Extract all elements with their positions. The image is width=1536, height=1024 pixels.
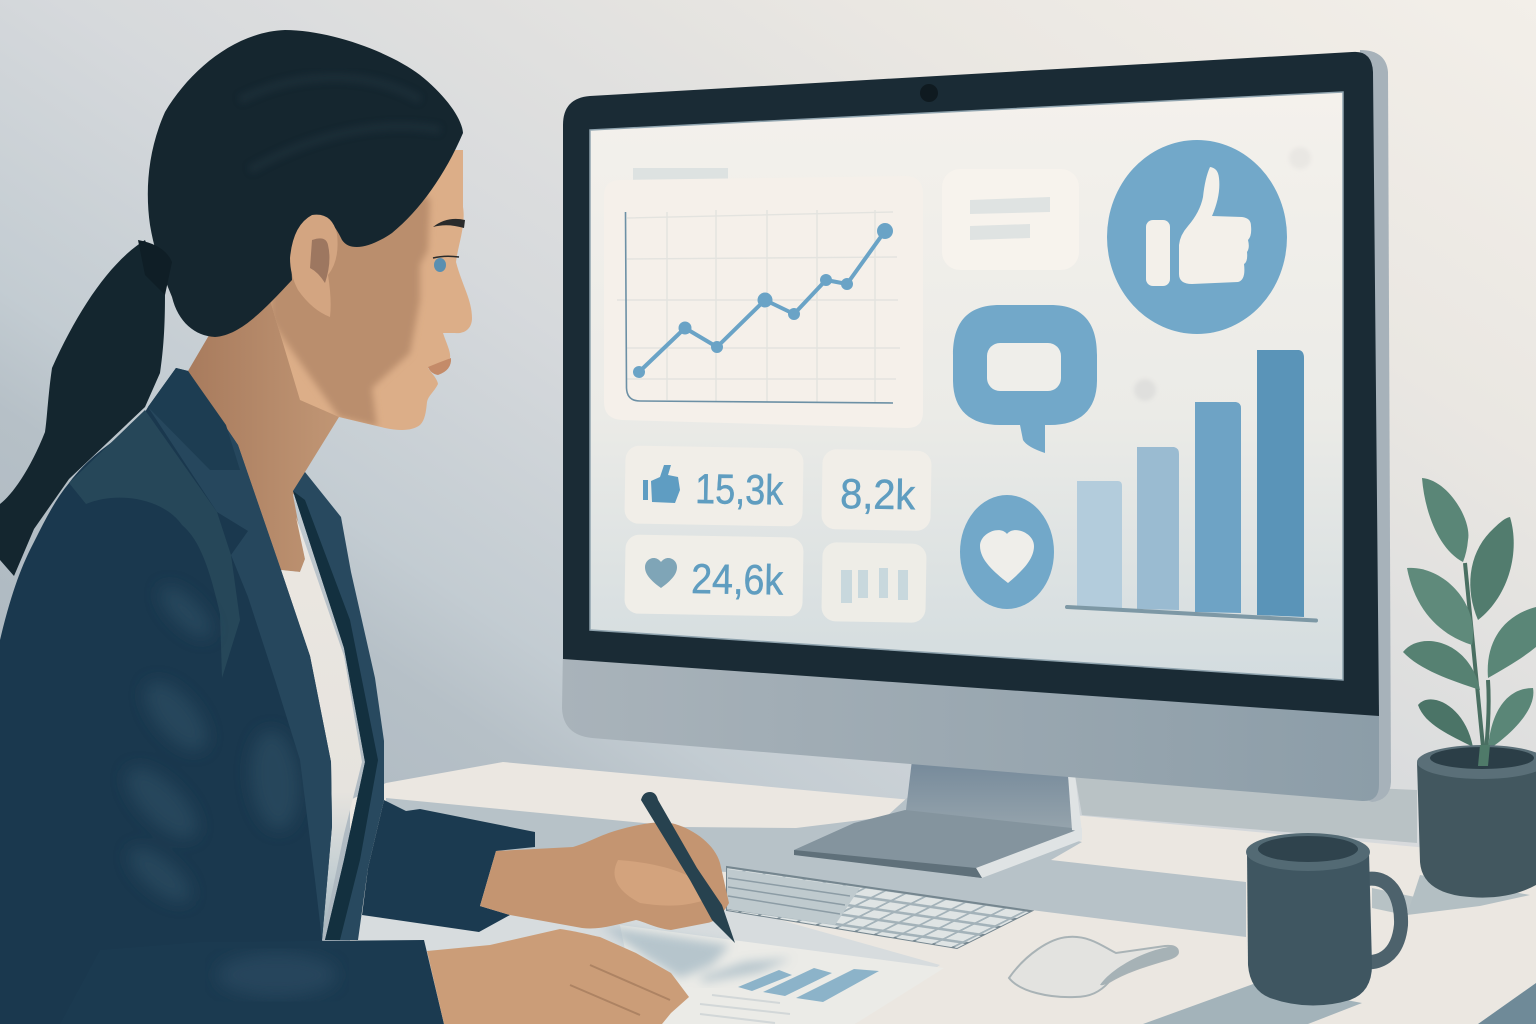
document text lines: [700, 995, 790, 1023]
title placeholder bar: [633, 168, 728, 183]
leaves: [1403, 478, 1536, 767]
mug shadow: [1143, 983, 1362, 1024]
desk lower area shade: [350, 905, 940, 1024]
ear: [290, 215, 338, 317]
text card: [942, 169, 1079, 270]
bar chart: [1067, 350, 1316, 620]
value 15,3k: 15,3k: [695, 465, 785, 514]
eyebrow: [433, 219, 465, 228]
chart axes: [626, 212, 893, 403]
blazer sleeve folds: [115, 578, 304, 912]
lower sleeve: [60, 940, 444, 1024]
desk corner shade: [1478, 983, 1536, 1024]
stat card: comments: [821, 449, 932, 531]
hair tie: [138, 240, 172, 295]
face: [270, 150, 472, 430]
stat card: mini bars: [821, 542, 927, 623]
document on desk: [600, 925, 944, 1024]
chart line: [633, 223, 893, 378]
blazer left lapel: [148, 368, 332, 940]
pen: [641, 792, 735, 943]
blazer collar shade: [148, 368, 240, 470]
hair highlight: [240, 78, 440, 170]
blazer: [0, 368, 384, 1024]
monitor chin: [562, 650, 1379, 801]
mug handle: [1352, 879, 1401, 962]
panel: line chart: [604, 176, 923, 428]
monitor: [562, 50, 1391, 802]
document bars: [738, 968, 879, 1002]
upper sleeve: [362, 800, 535, 932]
eye: [433, 256, 459, 272]
wall shadow behind monitor: [1075, 775, 1417, 843]
pot shadow: [1372, 888, 1420, 915]
lower hand: [427, 929, 689, 1024]
blazer shoulder panel: [69, 410, 240, 678]
lips: [428, 358, 451, 375]
smudged chart shadow: [600, 925, 792, 982]
icon: chat bubble: [953, 305, 1097, 453]
monitor bezel: [563, 52, 1379, 716]
value 8,2k: 8,2k: [840, 470, 917, 518]
faint dots: [1134, 147, 1311, 401]
monitor stand: [794, 760, 1082, 878]
icon: small thumb: [643, 465, 680, 503]
head: [138, 30, 472, 430]
icon: thumbs up circle: [1107, 140, 1287, 334]
stat card: hearts: [624, 534, 804, 617]
stat card: likes: [624, 445, 804, 527]
lower sleeve fold: [217, 953, 337, 997]
hair: [148, 30, 463, 337]
ponytail: [0, 240, 165, 576]
blazer right lapel: [293, 472, 384, 940]
webcam: [920, 84, 938, 102]
value 24,6k: 24,6k: [691, 555, 785, 604]
screen: [590, 92, 1343, 680]
neck: [188, 280, 400, 572]
coffee mug: [1246, 833, 1401, 1006]
upper hand: [480, 822, 729, 930]
monitor right edge: [1340, 50, 1391, 802]
woman: [0, 30, 735, 1024]
pot: [1417, 745, 1536, 898]
keyboard: [727, 867, 1031, 948]
mouse: [1009, 937, 1178, 997]
icon: small heart: [645, 558, 677, 588]
face shade: [271, 195, 432, 426]
desk: [350, 762, 1536, 1024]
shirt: [281, 517, 362, 940]
icon: heart circle: [960, 495, 1054, 609]
keyboard left rows: [727, 869, 860, 925]
plant: [1403, 478, 1536, 898]
desk shadow left: [386, 797, 1246, 937]
